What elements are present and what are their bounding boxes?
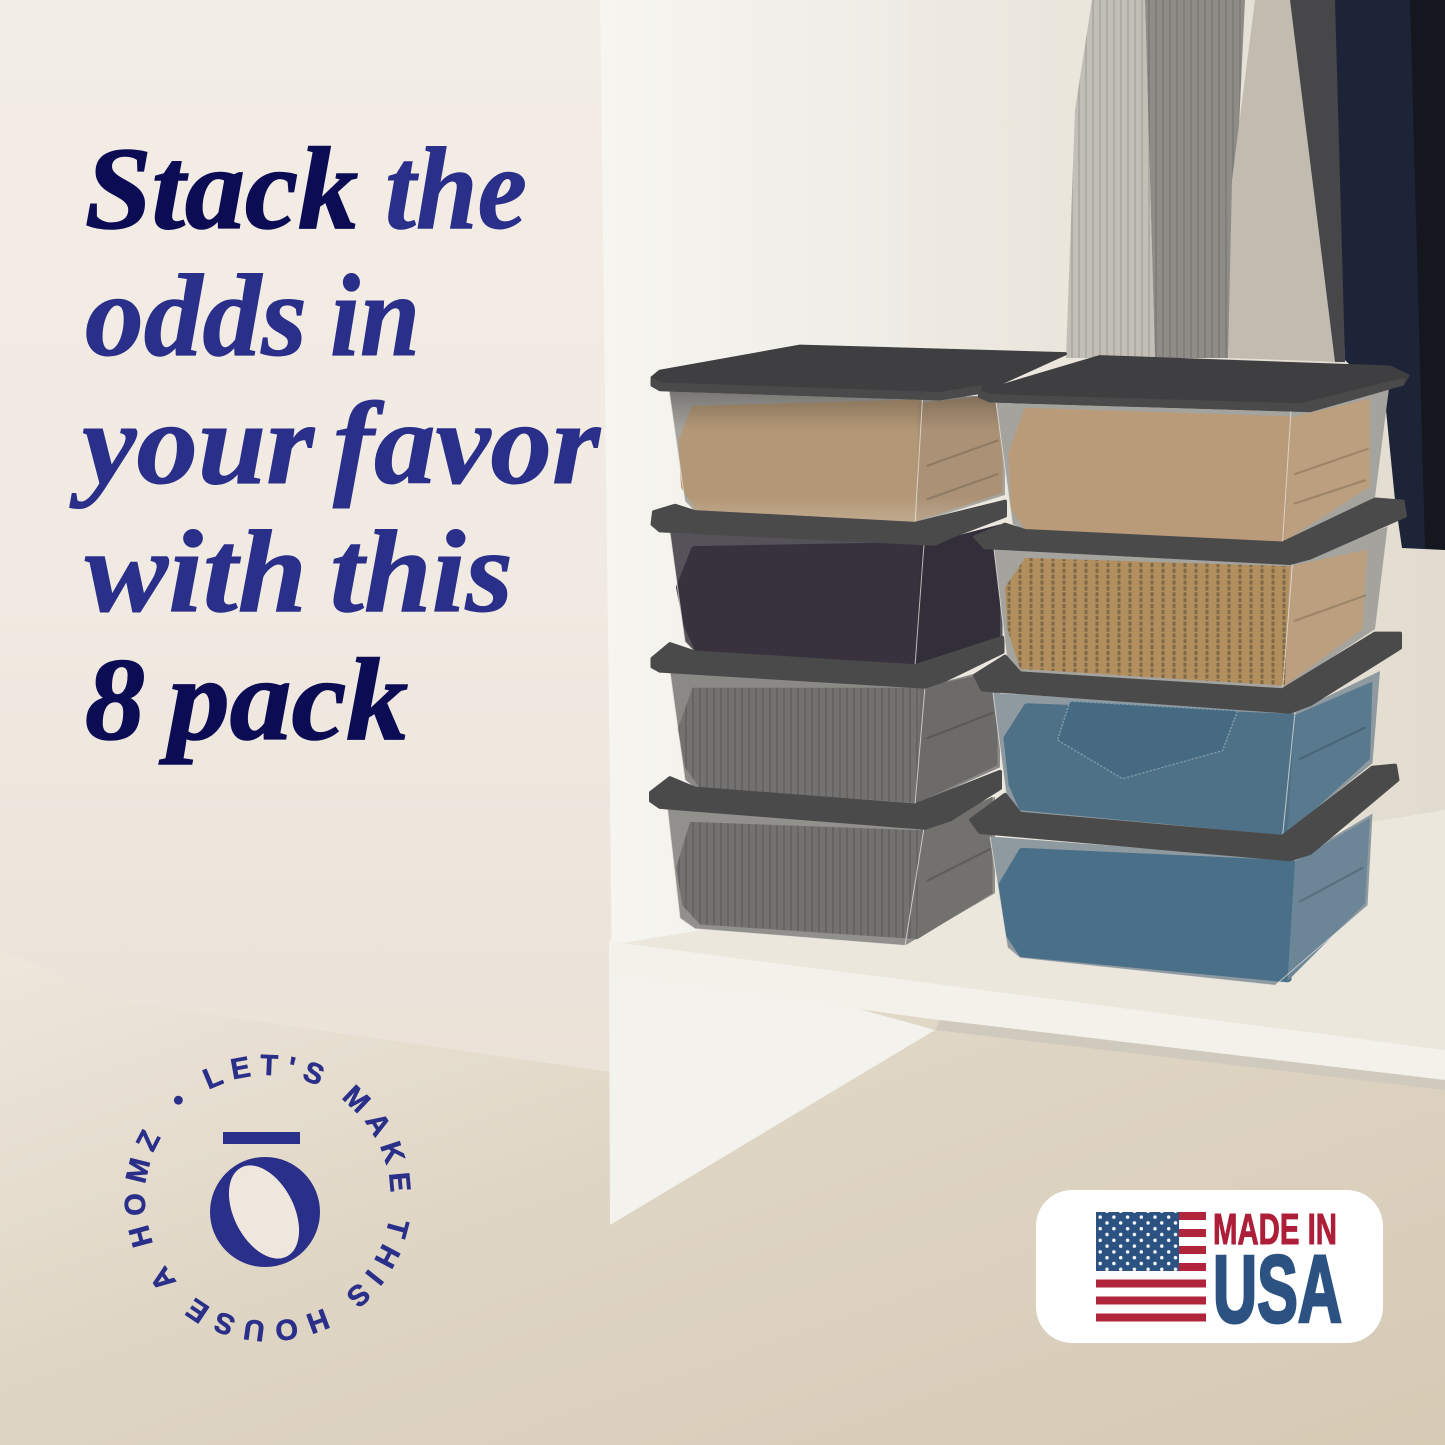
heading: the [385, 123, 527, 254]
heading: favor [333, 378, 601, 509]
box: left 2 plum [652, 501, 1005, 666]
closet panel below shelf [609, 940, 935, 1225]
heading: 8 [85, 634, 145, 765]
icon: jeans pocket [1058, 701, 1238, 779]
box: left 4 grey [651, 772, 1000, 945]
text: made in: MADE IN [1213, 1205, 1337, 1254]
background: left wall [0, 0, 610, 1072]
heading: pack [159, 634, 408, 765]
closet back wall [908, 0, 1445, 1000]
box: right 2 knit [975, 499, 1405, 690]
closet side panel [600, 0, 1000, 950]
icon: american flag [1096, 1212, 1206, 1322]
logo: circular badge [124, 1054, 411, 1342]
heading: your [70, 378, 315, 509]
heading: in [330, 250, 420, 381]
box: right 3 denim [975, 633, 1400, 837]
heading: with [85, 506, 307, 637]
heading: odds [85, 250, 307, 381]
text: USA: USA [1213, 1236, 1342, 1343]
heading: Stack [85, 123, 358, 254]
box: right 4 denim [971, 765, 1398, 985]
shelf [612, 810, 1445, 1090]
box: left 3 grey [652, 637, 1002, 805]
box: left 1 tan [652, 346, 1065, 524]
badge: made in USA [1036, 1190, 1383, 1343]
background: floor and carpet [0, 940, 1445, 1445]
heading [70, 123, 601, 765]
storage boxes [651, 346, 1408, 985]
circular slogan: • LET'S MAKE THIS HOUSE A HOMZ [124, 1054, 411, 1342]
hanging clothes [1066, 0, 1445, 550]
box: right 1 tan [980, 357, 1408, 543]
logo bar [223, 1132, 300, 1144]
heading: this [330, 506, 513, 637]
logo mark [210, 1154, 320, 1270]
